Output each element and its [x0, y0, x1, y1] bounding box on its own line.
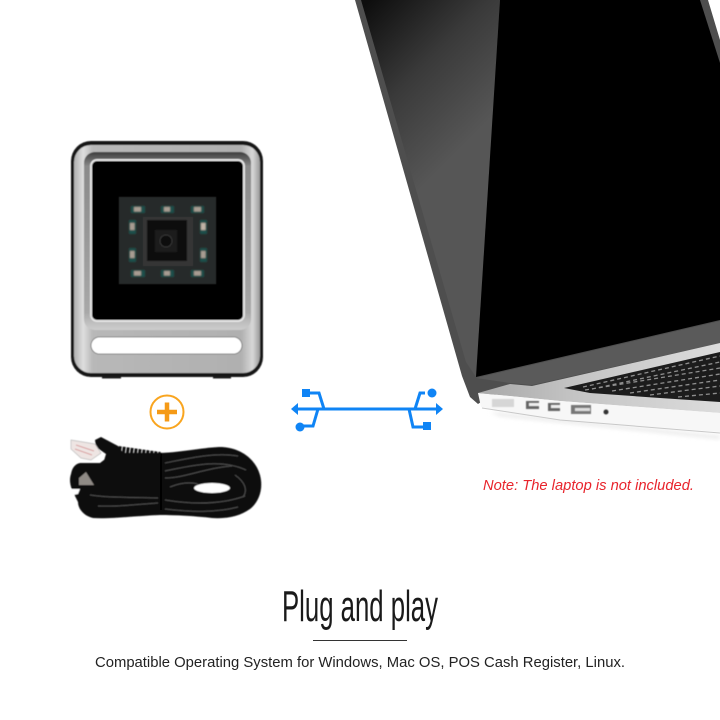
laptop hinge band	[476, 321, 720, 385]
cable loop gap	[194, 483, 230, 493]
scanner window outline	[90, 159, 245, 322]
scanner feet	[102, 375, 231, 378]
cable	[70, 437, 261, 518]
laptop lid inner reflection	[361, 0, 500, 377]
RJ45 contacts	[75, 445, 94, 455]
scanner window	[92, 161, 243, 320]
cable coil silhouette	[70, 447, 261, 518]
laptop deck	[478, 343, 720, 413]
scanner body	[71, 141, 263, 377]
note: Note: The laptop is not included.	[483, 477, 694, 494]
scanner slot	[91, 337, 242, 354]
cable sheen	[90, 455, 246, 511]
cable gap near connector	[70, 489, 80, 495]
scanner	[71, 141, 263, 378]
divider	[313, 640, 407, 641]
strain relief	[118, 452, 160, 458]
cable tie	[160, 453, 162, 510]
laptop lid edge	[355, 0, 720, 404]
RJ45 housing	[95, 437, 124, 467]
micro connector	[79, 472, 94, 485]
icon: USB double arrow	[291, 388, 443, 432]
laptop screen	[476, 0, 720, 377]
scanner module	[119, 197, 216, 284]
RJ45 plug	[71, 440, 101, 460]
title: Plug and play	[282, 582, 438, 631]
scanner silver frame	[74, 145, 260, 373]
laptop shadow	[490, 412, 720, 439]
icon: plus	[150, 396, 184, 428]
laptop	[355, 0, 720, 439]
laptop keyboard	[564, 352, 720, 402]
subtitle: Compatible Operating System for Windows, Mac OS, POS Cash Register, Linux.	[95, 654, 625, 671]
laptop ports	[492, 399, 608, 414]
laptop base underline	[482, 408, 720, 433]
laptop front edge	[478, 393, 720, 432]
LEDs	[129, 206, 207, 277]
scanner inner bevel	[84, 152, 251, 330]
